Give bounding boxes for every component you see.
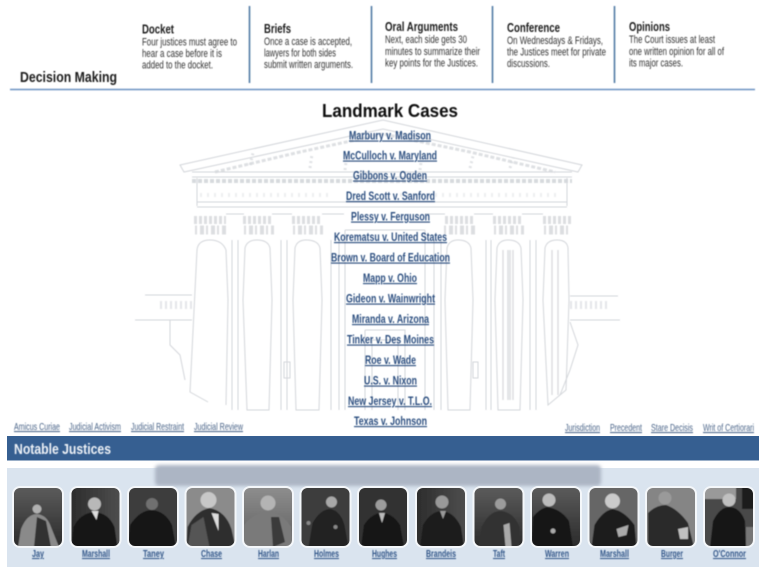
- step: Conference: [507, 21, 606, 70]
- step: Docket: [142, 22, 237, 72]
- list: landmark cases: Miranda v. Arizona: [352, 314, 429, 326]
- step: Opinions: [629, 20, 725, 70]
- names: justices: O'Connor: [713, 548, 746, 560]
- names: justices: Marshall: [82, 548, 110, 560]
- portrait: Holmes: [300, 487, 350, 547]
- links: legal terms left: Judicial Restraint: [131, 421, 184, 433]
- links: legal terms right: [565, 422, 754, 434]
- names: justices: Jay: [32, 548, 44, 560]
- portrait: Harlan: [243, 487, 293, 547]
- names: justices: Harlan: [258, 548, 279, 560]
- list: landmark cases: [331, 130, 450, 428]
- links: legal terms left: Judicial Review: [194, 421, 243, 433]
- wings: [135, 295, 620, 395]
- list: landmark cases: Brown v. Board of Education: [331, 252, 450, 264]
- portrait: Taney: [128, 487, 178, 547]
- step: Docket: hear a case before it is: [142, 48, 222, 60]
- step: Conference: the Justices meet for private: [507, 46, 606, 58]
- step: Opinions: its major cases.: [629, 58, 683, 70]
- names: justices: Taft: [493, 548, 505, 560]
- links: legal terms left: [14, 421, 243, 433]
- list: landmark cases: Mapp v. Ohio: [363, 273, 417, 285]
- step: Conference: Conference: [507, 21, 560, 35]
- portrait: O'Connor: [704, 487, 754, 547]
- names: justices: Warren: [545, 548, 569, 560]
- names: justices: Taney: [143, 548, 164, 560]
- names: justices: Burger: [661, 548, 683, 560]
- step: Oral Arguments: key points for the Justices.: [385, 58, 478, 70]
- links: legal terms right: Jurisdiction: [565, 422, 600, 434]
- building background illustration: [135, 120, 620, 410]
- portrait: Chase: [186, 487, 236, 547]
- portrait: Jay: [13, 487, 63, 547]
- portrait: Marshall: [70, 487, 120, 547]
- links: legal terms right: Precedent: [610, 422, 642, 434]
- names: justices: Holmes: [314, 548, 339, 560]
- names: justices: Brandeis: [426, 548, 456, 560]
- list: landmark cases: Gideon v. Wainwright: [346, 294, 435, 306]
- step: Briefs: Briefs: [264, 22, 291, 36]
- list: landmark cases: Marbury v. Madison: [349, 130, 431, 142]
- step: Oral Arguments: [385, 20, 480, 70]
- step: Opinions: The Court issues at least: [629, 34, 715, 46]
- capitals drawn as dotted bands: [194, 216, 572, 224]
- header: decision making: [10, 6, 755, 90]
- banner: Notable Justices: Notable Justices: [14, 442, 111, 458]
- step: Docket: Docket: [142, 22, 175, 36]
- step: Conference: discussions.: [507, 58, 550, 70]
- list: landmark cases: Korematsu v. United States: [334, 232, 447, 244]
- list: landmark cases: Roe v. Wade: [365, 355, 416, 367]
- list: landmark cases: Gibbons v. Ogden: [353, 170, 427, 182]
- list: landmark cases: McCulloch v. Maryland: [343, 150, 437, 162]
- step: Oral Arguments: Oral Arguments: [385, 20, 458, 34]
- list: landmark cases: Tinker v. Des Moines: [347, 334, 434, 346]
- portrait: Hughes: [358, 487, 408, 547]
- step: Briefs: [264, 22, 353, 71]
- links: legal terms right: Stare Decisis: [651, 422, 693, 434]
- names: justices: [32, 548, 746, 560]
- portrait: Taft: [474, 487, 524, 547]
- portrait: Warren: [531, 487, 581, 547]
- portrait: Brandeis: [416, 487, 466, 547]
- step: Docket: Four justices must agree to: [142, 36, 237, 48]
- list: landmark cases: Texas v. Johnson: [354, 416, 427, 428]
- step: Briefs: submit written arguments.: [264, 59, 353, 71]
- panel: justices portraits: [7, 465, 759, 567]
- step: Opinions: Opinions: [629, 20, 670, 34]
- banner: Notable Justices: [7, 436, 759, 460]
- links: legal terms left: Amicus Curiae: [14, 421, 60, 433]
- names: justices: Hughes: [372, 548, 397, 560]
- step: Briefs: lawyers for both sides: [264, 48, 336, 60]
- columns: [190, 240, 228, 405]
- portrait: Burger: [646, 487, 696, 547]
- names: justices: Marshall: [600, 548, 629, 560]
- links: legal terms left: Judicial Activism: [69, 421, 121, 433]
- list: landmark cases: New Jersey v. T.L.O.: [348, 396, 432, 408]
- step: Conference: On Wednesdays & Fridays,: [507, 35, 603, 47]
- step: Docket: added to the docket.: [142, 60, 213, 72]
- step: Oral Arguments: minutes to summarize their: [385, 46, 480, 58]
- names: justices: Chase: [201, 548, 222, 560]
- list: landmark cases: U.S. v. Nixon: [364, 376, 417, 388]
- portrait: Marshall: [588, 487, 638, 547]
- heading: Landmark Cases: Landmark Cases: [322, 100, 458, 121]
- section title: Decision Making: Decision Making: [20, 69, 117, 86]
- step: Opinions: one written opinion for all of: [629, 46, 725, 58]
- list: landmark cases: Plessy v. Ferguson: [351, 212, 430, 224]
- step: Oral Arguments: Next, each side gets 30: [385, 34, 467, 46]
- list: landmark cases: Dred Scott v. Sanford: [346, 191, 435, 203]
- step: Briefs: Once a case is accepted,: [264, 36, 352, 48]
